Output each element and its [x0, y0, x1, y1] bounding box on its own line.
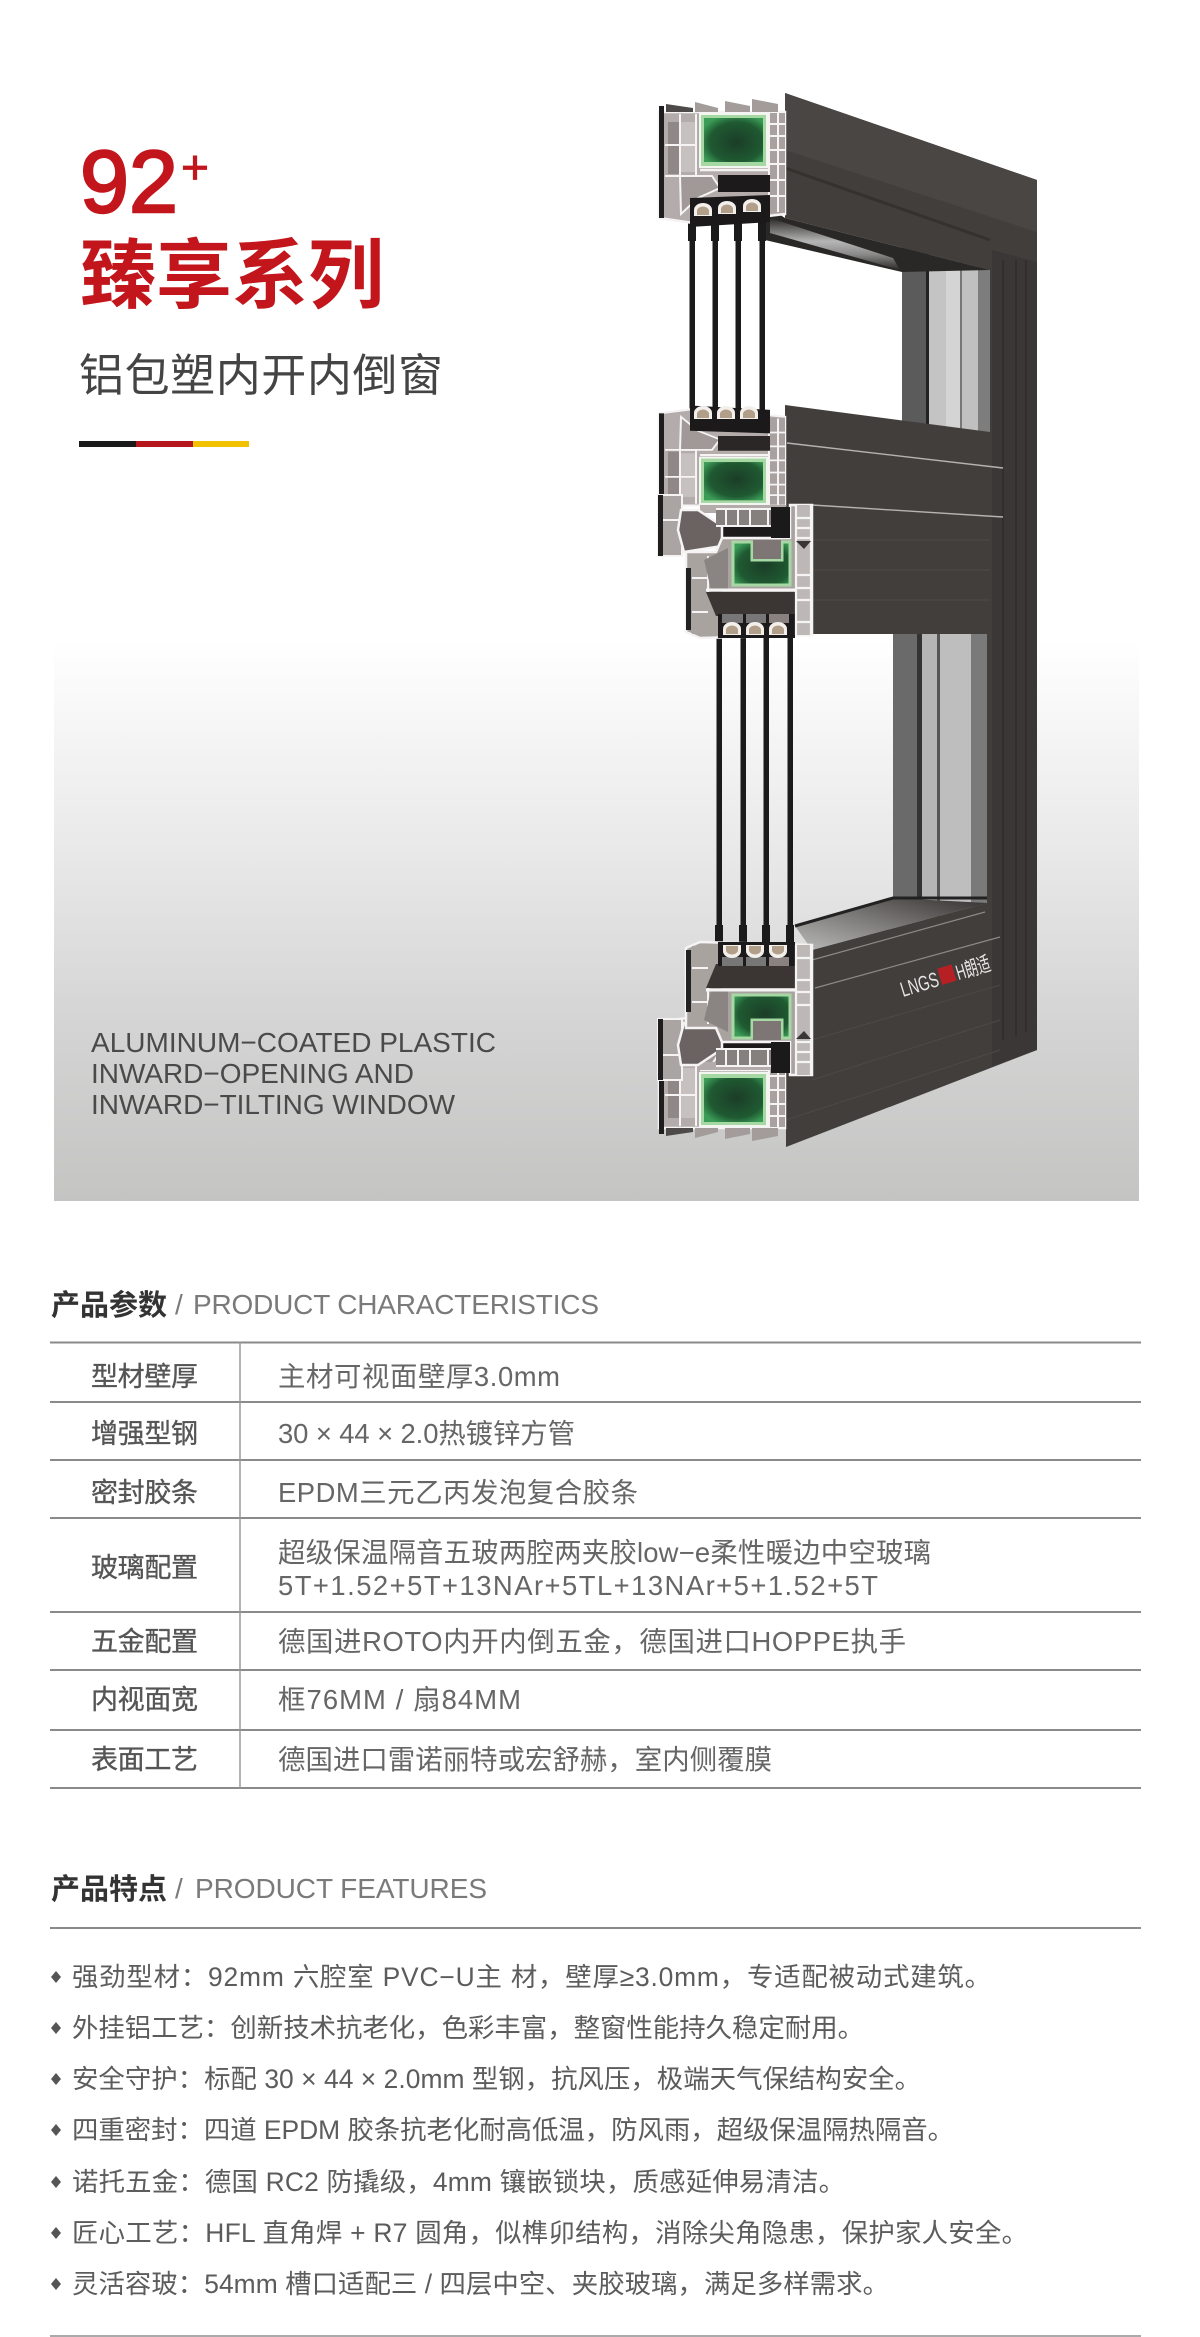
middle sash section — [686, 505, 812, 638]
row: wall thickness: 型材壁厚 — [91, 1362, 198, 1392]
row: surface finish: 表面工艺 — [91, 1745, 198, 1775]
row: wall thickness: 主材可视面壁厚3.0mm — [278, 1361, 560, 1392]
row: glass configuration: 5T+1.52+5T+13NAr+5TL+13NAr+5+1.52+5T — [278, 1570, 878, 1601]
heading: product features: 产品特点 — [51, 1873, 167, 1906]
row: hardware: 德国进ROTO内开内倒五金，德国进口HOPPE执手 — [278, 1626, 906, 1657]
row: interior face width: 框76MM / 扇84MM — [278, 1684, 521, 1715]
row: surface finish: 德国进口雷诺丽特或宏舒赫，室内侧覆膜 — [278, 1744, 772, 1775]
upper jamb stripes — [902, 240, 992, 440]
logo on frame: LNGS — [898, 968, 942, 1002]
glass panes upper — [688, 205, 766, 427]
top frame section — [659, 99, 785, 227]
feature 6: 匠心工艺：HFL 直角焊 + R7 圆角，似榫卯结构，消除尖角隐患，保护家人安全。 — [72, 2218, 1028, 2248]
heading: product characteristics: 产品参数 — [51, 1289, 167, 1322]
top reveal — [765, 205, 990, 272]
title: 92+: 92 — [80, 132, 178, 231]
feature 4: 四重密封：四道 EPDM 胶条抗老化耐高低温，防风雨，超级保温隔热隔音。 — [72, 2115, 954, 2145]
english product name: INWARD−OPENING AND — [91, 1058, 414, 1089]
row: sealing strip: 密封胶条 — [91, 1478, 198, 1508]
feature 2: 外挂铝工艺：创新技术抗老化，色彩丰富，整窗性能持久稳定耐用。 — [72, 2013, 864, 2043]
row: hardware: 五金配置 — [91, 1627, 198, 1657]
heading: product features: / — [175, 1873, 183, 1904]
row: reinforcing steel: 30 × 44 × 2.0热镀锌方管 — [278, 1418, 575, 1449]
dark aluminium face — [785, 93, 1037, 1147]
english product name — [91, 1027, 496, 1120]
row: glass configuration — [91, 1537, 931, 1601]
heading: product features: PRODUCT FEATURES — [195, 1873, 487, 1904]
row: wall thickness — [91, 1361, 560, 1392]
heading: product features — [51, 1873, 487, 1906]
lower jamb stripes — [893, 625, 989, 920]
row: glass configuration: 超级保温隔音五玻两腔两夹胶low−e柔性暖边中空玻璃 — [278, 1537, 931, 1568]
middle frame section — [658, 406, 790, 556]
bottom rule — [50, 2335, 1141, 2337]
table rules — [50, 1342, 1141, 1788]
feature 3: 安全守护：标配 30 × 44 × 2.0mm 型钢，抗风压，极端天气保结构安全。 — [72, 2064, 921, 2094]
row: sealing strip: EPDM三元乙丙发泡复合胶条 — [278, 1477, 638, 1508]
window cross-section product image — [658, 93, 1037, 1147]
heading: product characteristics — [51, 1289, 599, 1322]
sill reveal — [795, 898, 987, 950]
feature 1: 强劲型材：92mm 六腔室 PVC−U主 材，壁厚≥3.0mm，专适配被动式建筑。 — [72, 1962, 991, 1992]
bottom sash section — [686, 942, 812, 1075]
list: product features — [51, 1962, 1028, 2299]
bottom frame section — [658, 1016, 790, 1141]
feature 7: 灵活容玻：54mm 槽口适配三 / 四层中空、夹胶玻璃，满足多样需求。 — [72, 2269, 889, 2299]
table: product characteristics — [50, 1342, 1141, 1788]
row: reinforcing steel — [91, 1418, 575, 1449]
row: glass configuration: 玻璃配置 — [91, 1553, 198, 1583]
logo on frame — [898, 953, 993, 1002]
row: sealing strip — [91, 1477, 638, 1508]
english product name: INWARD−TILTING WINDOW — [91, 1089, 456, 1120]
tricolor accent bar — [79, 441, 249, 447]
row: reinforcing steel: 增强型钢 — [91, 1419, 198, 1449]
face tones and seams — [785, 93, 1037, 1120]
title: 92+: + — [181, 142, 209, 195]
heading: product characteristics: / — [175, 1289, 183, 1320]
row: interior face width: 内视面宽 — [91, 1685, 198, 1715]
title: series name: 臻享系列 — [80, 234, 384, 319]
glass panes lower — [715, 612, 794, 962]
panel: gradient background — [54, 640, 1139, 1201]
logo on frame: H朗适 — [953, 953, 993, 985]
english product name: ALUMINUM−COATED PLASTIC — [91, 1027, 496, 1058]
heading: product characteristics: PRODUCT CHARACTERISTICS — [193, 1289, 599, 1320]
feature 5: 诺托五金：德国 RC2 防撬级，4mm 镶嵌锁块，质感延伸易清洁。 — [72, 2167, 845, 2197]
row: interior face width — [91, 1684, 521, 1715]
features rule — [50, 1927, 1141, 1929]
subtitle: 铝包塑内开内倒窗 — [79, 350, 443, 401]
